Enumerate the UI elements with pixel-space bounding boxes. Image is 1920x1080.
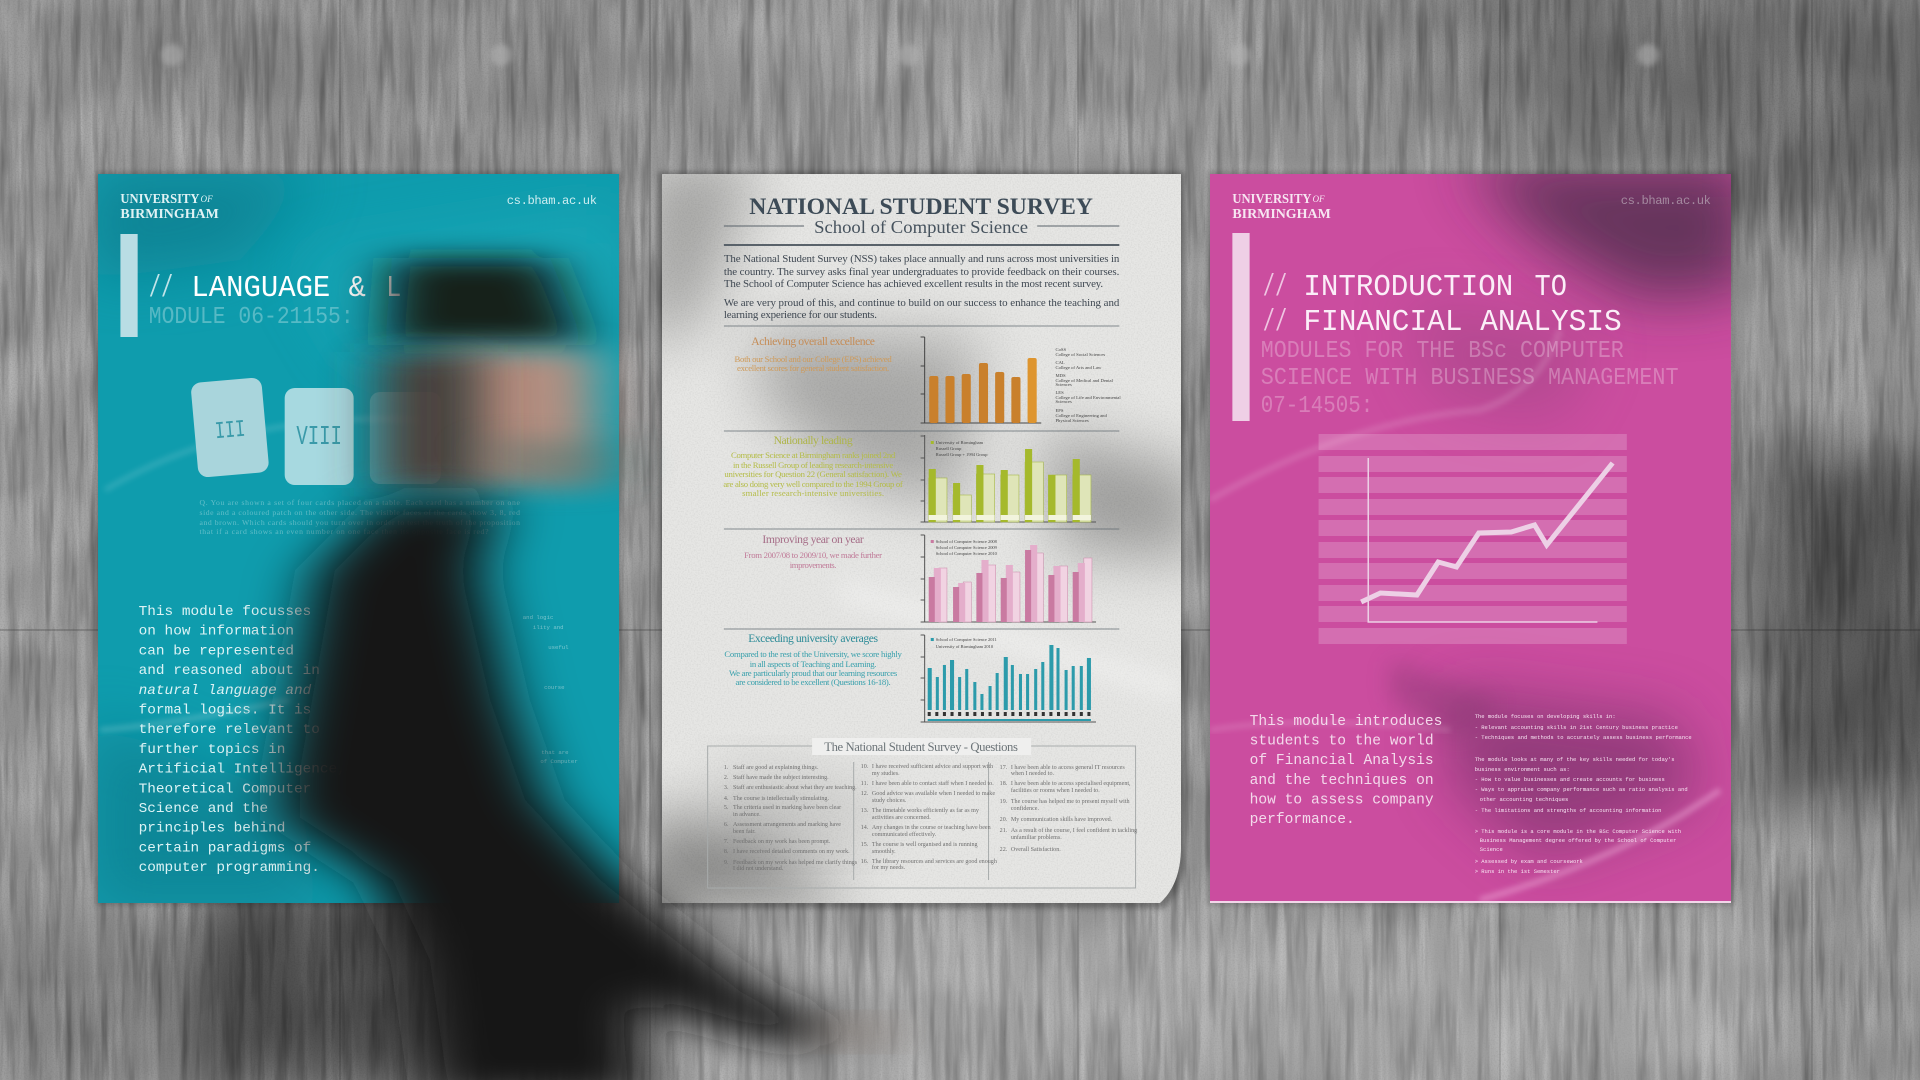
section: improving year on year: From 2007/08 to 2009/10, we made further — [744, 550, 882, 560]
secondary column fragments: course — [544, 684, 565, 691]
section: exceeding university averages: are considered to be excellent (Questions 16-18). — [736, 677, 891, 687]
body text — [139, 604, 346, 876]
chart: year on year: School of Computer Science 2009 — [936, 545, 998, 550]
questions column 2: 14. — [861, 825, 869, 831]
secondary column fragments: ility and — [533, 624, 564, 631]
skills list: > Runs in the 1st Semester — [1475, 868, 1560, 875]
skills list: Business Management degree offered by the School of Computer — [1480, 837, 1676, 844]
poster: national student survey (white) — [640, 160, 1200, 910]
chart: russell group comparison: Russell Group + 1994 Group — [936, 452, 988, 457]
section: improving year on year: Improving year on year — [762, 533, 864, 546]
website address: cs.bham.ac.uk — [1621, 194, 1711, 208]
chart: university averages: School of Computer Science 2011 — [936, 637, 997, 642]
chart: satisfaction bars: EPS — [1055, 409, 1064, 414]
chart: russell group comparison: Russell Group — [936, 446, 962, 451]
question text: and brown. Which cards should you turn over in order to test the truth of the proposition — [200, 518, 520, 527]
chart: satisfaction bars: Physical Sciences — [1055, 419, 1089, 424]
questions column 1 — [724, 764, 858, 872]
questions column 1: The course is intellectually stimulating. — [733, 796, 829, 802]
university logo: BIRMINGHAM — [1232, 206, 1331, 221]
chart: satisfaction bars — [921, 337, 1121, 424]
logic cards — [190, 377, 441, 485]
body text: This module focusses — [139, 604, 311, 620]
poster title — [149, 271, 401, 306]
body text: formal logics. It is — [139, 703, 311, 718]
university logo — [1232, 191, 1331, 221]
introduction text: The School of Computer Science has achieved excellent results in the most recent survey. — [724, 278, 1103, 290]
module subtitle: 07-14505: — [1261, 393, 1373, 420]
questions column 3: 20. — [1000, 817, 1008, 823]
questions column 1: 8. — [724, 849, 729, 855]
chart: university averages — [921, 635, 1096, 722]
body text: certain paradigms of — [139, 840, 311, 856]
questions column 1: Feedback on my work has helped me clarify things — [733, 859, 858, 866]
body text: of Financial Analysis — [1250, 753, 1434, 769]
questions column 2: for my needs. — [872, 864, 906, 871]
chart: russell group comparison: University of Birmingham — [936, 440, 984, 445]
chart: satisfaction bars: CoSS — [1055, 348, 1067, 353]
accent bar — [120, 234, 138, 337]
questions column 3: Overall Satisfaction. — [1011, 846, 1061, 853]
questions column 1: 3. — [724, 785, 729, 791]
body text: computer programming. — [139, 860, 320, 876]
questions column 3: when I needed to. — [1011, 771, 1055, 777]
section: exceeding university averages — [724, 632, 903, 687]
chart: satisfaction bars: MDS — [1055, 374, 1066, 379]
skills list: The module focuses on developing skills in: — [1475, 713, 1616, 720]
section: improving year on year: improvements. — [790, 560, 836, 570]
body text: can be represented — [139, 643, 294, 659]
poster title: INTRODUCTION — [1303, 270, 1513, 305]
questions column 3: unfamiliar problems. — [1011, 834, 1062, 841]
body text: natural language and — [139, 683, 312, 699]
module subtitle — [1261, 338, 1679, 420]
questions column 2: The library resources and services are good enough — [872, 859, 997, 865]
skills list: > Assessed by exam and coursework — [1475, 858, 1583, 865]
questions column 1: 6. — [724, 822, 729, 828]
poster title: TO — [1535, 270, 1567, 305]
wall tie holes — [161, 44, 1659, 66]
introduction text: the country. The survey asks final year undergraduates to provide feedback on their courses. — [724, 266, 1119, 278]
poster: introduction to financial analysis (pink) — [1208, 160, 1750, 905]
poster title — [1263, 270, 1622, 340]
poster title: FINANCIAL ANALYSIS — [1303, 305, 1622, 340]
questions column 2: 10. — [861, 764, 869, 770]
university logo: BIRMINGHAM — [120, 206, 219, 221]
questions column 1: been fair. — [733, 828, 756, 835]
questions column 1: Staff are enthusiastic about what they are teaching. — [733, 784, 857, 791]
section: nationally leading: Computer Science at Birmingham ranks joined 2nd — [731, 450, 896, 460]
questions column 1: Assessment arrangements and marking have — [733, 822, 841, 828]
section: exceeding university averages: We are particularly proud that our learning resources — [729, 668, 898, 678]
body text: and reasoned about in — [139, 663, 320, 679]
chart: satisfaction bars: College of Medical and Dental — [1055, 379, 1114, 384]
survey subtitle: School of Computer Science — [814, 217, 1028, 237]
module subtitle: MODULES FOR THE BSc COMPUTER — [1261, 338, 1624, 365]
face — [445, 350, 600, 485]
hand — [815, 1018, 895, 1046]
questions column 1: in advance. — [733, 812, 761, 818]
secondary column fragments: and logic — [523, 614, 553, 621]
torso and arm — [280, 500, 840, 1080]
body text: further topics in — [139, 742, 285, 758]
introduction text — [724, 253, 1120, 321]
questions column 3: 17. — [1000, 765, 1008, 771]
poster title: LANGUAGE — [191, 271, 330, 306]
section: nationally leading — [723, 434, 903, 498]
chart: satisfaction bars: College of Social Sciences — [1055, 353, 1105, 358]
section: achieving overall excellence — [735, 335, 892, 373]
website address: cs.bham.ac.uk — [507, 194, 597, 208]
skills list: - The limitations and strengths of accounting information — [1475, 807, 1661, 814]
questions panel — [708, 738, 1137, 888]
poster title: & — [349, 271, 366, 306]
questions column 2: communicated effectively. — [872, 831, 937, 838]
section: improving year on year — [744, 533, 882, 570]
questions column 2: I have received sufficient advice and support with — [872, 763, 993, 770]
module code: MODULE 06-21155: — [149, 304, 354, 331]
survey title: NATIONAL STUDENT SURVEY — [749, 194, 1093, 220]
questions column 2: 13. — [861, 808, 869, 814]
question text: side and a coloured patch on the other side. The visible faces of the cards show 3, 8, red — [200, 508, 520, 517]
secondary column fragments: of Computer — [540, 758, 578, 765]
questions column 3: 19. — [1000, 799, 1008, 805]
body text: on how information — [139, 624, 294, 640]
hair — [385, 258, 585, 345]
section: achieving overall excellence: excellent scores for general student satisfaction. — [737, 363, 889, 373]
skills list: business environment such as: — [1475, 766, 1570, 773]
questions column 1: I did not understand. — [733, 866, 784, 872]
questions column 2: 11. — [861, 781, 869, 787]
questions column 3 — [1000, 765, 1137, 853]
skills list: - Relevant accounting skills in 21st Century business practice — [1475, 724, 1678, 731]
introduction text: learning experience for our students. — [724, 309, 877, 321]
questions column 1: 5. — [724, 805, 729, 811]
body text: and the techniques on — [1250, 773, 1434, 789]
questions column 2: smoothly. — [872, 849, 896, 855]
questions column 2 — [861, 763, 997, 871]
question text — [200, 498, 521, 536]
questions column 2: Any changes in the course or teaching have been — [872, 825, 991, 831]
poster title: // — [1263, 305, 1287, 340]
body text: Theoretical Computer — [139, 781, 311, 797]
questions column 1: 7. — [724, 839, 729, 845]
chart: russell group comparison — [921, 435, 1096, 522]
chart: university averages: University of Birmingham 2010 — [936, 644, 994, 649]
poster title: // — [149, 271, 173, 306]
secondary column fragments: useful — [548, 644, 569, 651]
section: exceeding university averages: in all aspects of Teaching and Learning. — [750, 659, 876, 669]
questions column 1: I have received detailed comments on my work. — [733, 849, 850, 855]
skills list: other accounting techniques — [1480, 796, 1568, 803]
skills list: The module looks at many of the key skills needed for today's — [1475, 756, 1675, 763]
questions column 1: 9. — [724, 860, 729, 866]
body text: This module introduces — [1250, 714, 1442, 730]
questions column 3: 22. — [1000, 847, 1008, 853]
section: achieving overall excellence: Achieving overall excellence — [751, 335, 875, 348]
skills list: - Techniques and methods to accurately assess business performance — [1475, 734, 1692, 741]
poster: language and logic (teal) — [90, 170, 622, 910]
questions column 3: 21. — [1000, 828, 1008, 834]
questions column 3: I have been able to access specialised equipment, — [1011, 781, 1131, 787]
university logo: UNIVERSITY — [120, 191, 200, 206]
questions column 2: 12. — [861, 791, 869, 797]
university logo: OF — [1312, 194, 1325, 204]
body text: how to assess company — [1250, 792, 1434, 808]
section: exceeding university averages: Compared to the rest of the University, we score highly — [724, 649, 903, 659]
accent bar — [1232, 233, 1250, 421]
section: nationally leading: in the Russell Group of leading research-intensive — [733, 460, 893, 470]
questions column 3: confidence. — [1011, 805, 1039, 812]
skills list — [1475, 713, 1692, 875]
logic cards: III — [214, 417, 247, 446]
questions column 2: 15. — [861, 842, 869, 848]
chart: year on year — [921, 535, 1096, 622]
questions column 2: 16. — [861, 859, 869, 865]
body text: students to the world — [1250, 734, 1434, 750]
question text: Q. You are shown a set of four cards placed on a table. Each card has a number on one — [200, 498, 521, 507]
module subtitle: SCIENCE WITH BUSINESS MANAGEMENT — [1261, 365, 1679, 392]
section: achieving overall excellence: Both our School and our College (EPS) achieved — [735, 354, 892, 364]
body text: therefore relevant to — [139, 722, 320, 738]
university logo: UNIVERSITY — [1232, 191, 1312, 206]
body text: principles behind — [139, 821, 285, 837]
skills list: Science — [1480, 846, 1503, 853]
body text: performance. — [1250, 812, 1355, 828]
university logo — [120, 191, 219, 221]
questions heading: The National Student Survey - Questions — [824, 740, 1018, 754]
questions column 2: I have been able to contact staff when I needed to. — [872, 780, 994, 787]
university logo: OF — [201, 194, 213, 204]
section: nationally leading: Nationally leading — [774, 434, 853, 447]
questions column 3: facilities or rooms when I needed to. — [1011, 787, 1100, 794]
skills list: - Ways to appraise company performance such as ratio analysis and — [1475, 786, 1688, 793]
questions column 2: activities are concerned. — [872, 815, 931, 821]
introduction text: We are very proud of this, and continue to build on our success to enhance the teaching and — [724, 297, 1120, 309]
questions column 3: My communication skills have improved. — [1011, 817, 1113, 823]
chart: satisfaction bars: College of Engineering and — [1055, 414, 1107, 419]
skills list: > This module is a core module in the BSc Computer Science with — [1475, 828, 1681, 835]
section: exceeding university averages: Exceeding university averages — [748, 632, 878, 645]
chart: year on year: School of Computer Science 2008 — [936, 539, 998, 544]
questions column 2: The timetable works efficiently as far as my — [872, 807, 979, 814]
chart: satisfaction bars: CAL — [1055, 361, 1065, 366]
question text: that if a card shows an even number on one face then its opposite face is red? — [200, 527, 489, 536]
questions column 3: 18. — [1000, 781, 1008, 787]
chart: satisfaction bars: Sciences — [1055, 400, 1072, 405]
questions column 3: The course has helped me to present myself with — [1011, 798, 1130, 805]
questions column 1: Staff have made the subject interesting. — [733, 774, 829, 781]
questions column 2: The course is well organised and is running — [872, 842, 978, 848]
chart: satisfaction bars: College of Life and Environmental — [1055, 396, 1121, 401]
questions column 3: I have been able to access general IT resources — [1011, 765, 1125, 771]
questions column 1: 2. — [724, 775, 729, 781]
questions column 2: Good advice was available when I needed to make — [872, 791, 995, 797]
questions column 1: Staff are good at explaining things. — [733, 764, 819, 771]
line chart graphic — [1319, 434, 1627, 644]
poster title: // — [1263, 270, 1287, 305]
section: nationally leading: universities for Question 22 (General satisfaction). We — [724, 469, 902, 479]
body text — [1250, 714, 1442, 828]
questions column 1: The criteria used in marking have been clear — [733, 805, 841, 811]
chart: satisfaction bars: LES — [1055, 391, 1064, 396]
body text: Science and the — [139, 801, 268, 817]
section: nationally leading: are also doing very well compared to the 1994 Group of — [723, 479, 903, 489]
introduction text: The National Student Survey (NSS) takes place annually and runs across most universities in — [724, 253, 1120, 265]
secondary column fragments — [523, 614, 578, 765]
logic cards: VIII — [296, 422, 342, 453]
secondary column fragments: that are — [541, 749, 569, 756]
questions column 1: 1. — [724, 765, 729, 771]
skills list: - How to value businesses and create accounts for business — [1475, 776, 1665, 783]
poster title: L — [386, 271, 401, 306]
questions column 1: 4. — [724, 796, 729, 802]
chart: year on year: School of Computer Science 2010 — [936, 551, 998, 556]
chart: satisfaction bars: Sciences — [1055, 383, 1072, 388]
questions column 3: As a result of the course, I feel confident in tackling — [1011, 827, 1137, 834]
questions column 2: my studies. — [872, 771, 900, 777]
body text: Artificial Intelligence, — [139, 762, 346, 778]
questions column 2: study choices. — [872, 798, 907, 804]
section: nationally leading: smaller research-intensive universities. — [742, 488, 884, 498]
questions column 1: Feedback on my work has been prompt. — [733, 839, 831, 845]
chart: satisfaction bars: College of Arts and Law — [1055, 366, 1102, 371]
blurred passer-by — [280, 258, 895, 1080]
